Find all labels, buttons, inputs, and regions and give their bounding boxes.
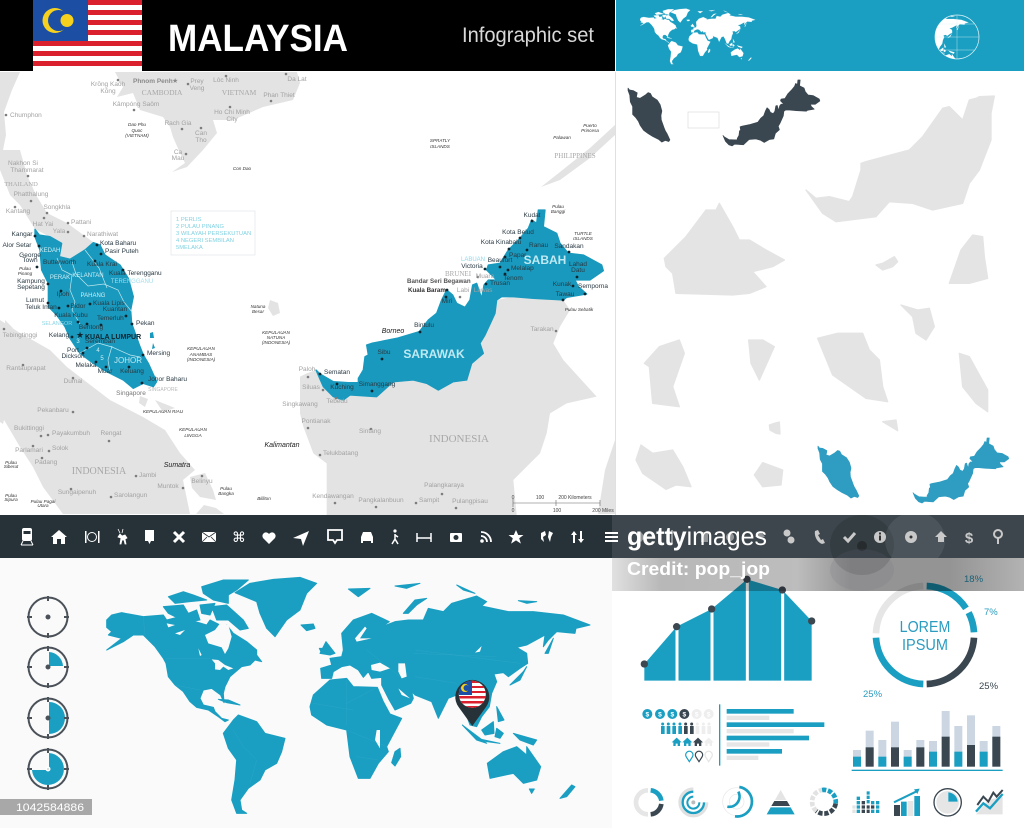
infographic rows: people [661,722,711,734]
map labels: Bukittinggi [14,425,44,432]
map labels: KELANTAN [72,273,104,279]
icon: cutlery [85,531,100,543]
map labels: Kuala Lipis [93,300,126,307]
map labels: Teluk Intan [25,304,57,311]
small icon: arcs [723,787,752,816]
map labels: Sipura [4,497,18,502]
map labels: Melalap [511,265,534,272]
world map [107,577,590,813]
watermark band [612,549,1024,591]
scale bar: 200 Miles [592,508,614,514]
map labels: ANAMBAS [189,352,213,357]
map labels: Can [195,130,207,137]
map labels: Sungaipenuh [58,489,97,496]
map labels: Bangka [218,491,234,496]
map labels: Parlamari [15,447,43,454]
map labels: Telukbatang [323,450,358,457]
map labels: Natuna [251,304,266,309]
map labels: Krŏng Kaôh [91,81,126,88]
map labels: Dickson [61,353,85,360]
watermark logo: gettyimages [627,521,767,551]
map labels: Kalimantan [264,442,300,449]
map labels: Utara [37,503,49,508]
map labels: Rantauprapat [6,365,46,372]
map labels: Singkawang [282,401,318,408]
icon: sort arrows [571,531,584,543]
map labels: Palawan [553,135,571,140]
map labels: Muar [98,368,113,375]
map labels: PHILIPPINES [554,152,596,160]
map labels: KEPULAUAN [262,330,291,335]
map labels: Keluang [120,368,144,375]
map labels: Songkhla [43,204,71,211]
map labels: Pulau Sebatik [565,307,594,312]
map labels: Nakhon Si [8,160,38,167]
scale bar: 100 [536,495,544,501]
percent label 25% blue: 25% [863,689,883,700]
map labels: Tebingtinggi [3,332,37,339]
map labels: Pulau [220,486,232,491]
small legend box [688,112,719,128]
map labels: Siluas [302,384,321,391]
map labels: Pangkalanbuun [358,497,404,504]
infographic rows: dollars: $ [695,711,699,718]
header: black title bar [0,0,615,71]
map labels: Temerluh [97,315,124,322]
map labels: Kuantan [103,306,127,313]
map labels: KEPULAUAN [187,346,216,351]
map labels: Tho [195,137,207,144]
panel: main map of Malaysia [0,72,615,515]
scale bar: 0 [512,508,515,514]
map legend box: 3 WILAYAH PERSEKUTUAN [176,231,251,237]
map labels: Semporna [578,283,608,290]
map legend box: 1 PERLIS [176,217,202,223]
map labels: Pulau [552,204,564,209]
map labels: Butterworth [43,259,77,266]
small icon: rising bars [894,789,920,816]
map labels: Yala [53,228,66,235]
map labels: Seremban [85,338,115,345]
map labels: LABUAN [461,257,485,263]
map labels: SABAH [524,253,566,267]
map labels: PAHANG [81,293,106,299]
map labels: Pulau [19,266,31,271]
stacked column chart [852,711,1003,771]
map labels: Prey [190,78,204,85]
map labels: Singapore [116,390,146,397]
map labels: Muntok [157,483,179,490]
icon: speech bubble [328,530,342,543]
map labels: Kuala Kubu [54,312,88,319]
map labels: Rach Gia [164,120,192,127]
small icon: pie clock [934,789,961,816]
infographic rows: dollars: $ [645,711,649,718]
area chart [641,576,815,682]
map labels: SARAWAK [403,347,465,361]
panel: lower-left background [0,558,612,828]
image id badge: 1042584886 [16,802,84,814]
map labels: KEPULAUAN RIAU [143,409,184,414]
map labels: Quoc [132,128,143,133]
toolbar [0,515,1024,558]
icon: phone [815,530,825,544]
percent label 25% dark: 25% [979,681,999,692]
icon: home [51,530,67,544]
map labels: Borneo [382,328,404,335]
donut centre label: LOREM [900,619,950,636]
map labels: PERAK [50,275,70,281]
seas and lakes: Eurasia [355,627,482,748]
map labels: Mersing [147,350,171,357]
map labels: LINGGA [184,433,202,438]
map labels: 4 [96,348,100,354]
map labels: Victoria [461,263,483,270]
map labels: Con Dao [233,166,252,171]
land: Kalimantan [300,297,597,515]
map labels: Palangkaraya [424,482,464,489]
map labels: Muara [476,273,495,280]
map labels: Pulangpisau [452,498,488,505]
icon: deer [118,529,127,544]
map labels: George [19,252,41,259]
title: MALAYSIA [168,18,348,60]
icon: walker [392,529,398,544]
map labels: Dao Phu [128,122,146,127]
map labels: Kelang [49,332,69,339]
map labels: Johor Baharu [148,376,187,383]
seas and lakes: Americas [167,623,233,670]
map labels: CAMBODIA [142,88,183,97]
watermark credit: Credit: pop_jop [627,559,770,579]
map labels: Paloh [299,366,316,373]
map labels: BRUNEI [445,270,472,278]
map labels: Kuching [330,384,354,391]
map labels: Pulau [5,493,17,498]
horizontal bar chart [727,709,824,760]
scale bar: 200 Kilometers [558,495,592,501]
map labels: Papar [509,252,527,259]
city markers: neighbouring countries [4,74,556,508]
map labels: Bandar Seri Begawan [407,278,471,285]
percent label 7%: 7% [984,607,998,618]
icon: star [508,530,524,544]
icon: check [844,533,855,541]
donut centre label [900,619,950,654]
panel divider [615,72,616,515]
map labels: Jambi [139,472,156,479]
map labels: Bentong [79,324,103,331]
infographic rows: houses [672,738,714,746]
icon: send [293,531,309,546]
silhouette: Malaysia blue [818,438,1009,503]
map labels: Payakumbuh [52,430,90,437]
map labels: Kuala Baram [408,287,446,294]
scale bar: 100 [553,508,561,514]
map labels: Bidor [70,303,86,310]
silhouette: Malaysia dark [628,80,820,146]
map labels: Ranau [529,242,549,249]
map labels: Kantang [6,208,30,215]
city markers: Malaysia [35,221,585,391]
map labels: Ho Chi Minh [214,109,250,116]
map labels: Melaka [76,362,97,369]
icon: earth [541,531,553,542]
map labels: KEPULAUAN [179,427,208,432]
map labels: Port [67,347,79,354]
country borders [143,617,520,783]
map labels: Datu [571,267,585,274]
map labels: Phnom Penh [133,78,173,85]
icons hidden behind watermark [637,530,765,544]
map labels: SPRATLY [430,138,451,143]
icon: flag marker [145,530,154,544]
map labels: INDONESIA [72,466,127,477]
clock: three quarters [27,748,69,790]
map labels: Sandakan [554,243,584,250]
percent label 18%: 18% [964,574,984,585]
map labels: Billiton [257,496,271,501]
map labels: Narathiwat [87,231,118,238]
map pin with Malaysian flag [455,680,489,726]
map labels: Solok [52,445,69,452]
map labels: Trusan [490,280,510,287]
map labels: Chumphon [10,112,42,119]
map labels: Sibu [377,349,391,356]
map labels: Town [22,257,38,264]
map labels: 3 [76,339,80,345]
map labels: Tawau [556,291,575,298]
infographics group [636,576,1003,816]
map labels: Kunak [553,281,572,288]
map labels: Sarolangun [114,492,148,499]
map labels: Pinang [18,271,33,276]
map labels: Thammarat [10,167,44,174]
icon: globe [934,14,980,60]
icon: location pin [994,530,1002,544]
map labels: Alor Setar [3,242,32,249]
map labels: JOHOR [114,356,142,365]
map labels: Sepetang [17,284,45,291]
icon: up arrow [935,531,947,542]
clock: empty [27,596,69,638]
map labels: Dumai [64,378,82,385]
map labels: Kota Baharu [100,240,137,247]
icon: mail [202,532,216,542]
map labels: TERENGGANU [111,279,153,285]
map labels: Padang [35,459,58,466]
small icon: pixel bars [852,791,879,813]
map labels: Tenom [503,275,523,282]
vertical rule [719,704,720,766]
map labels: Ca [174,149,183,156]
infographic rows: dollars: $ [670,711,674,718]
small icon: concentric rings [680,789,707,816]
map labels: KEDAH [40,248,60,254]
map labels: Kâmpóng Saôm [113,101,159,108]
map labels: Miri [442,298,452,305]
clock: quarter [27,646,69,688]
icon: camera [450,533,462,542]
map labels: Kampung [17,278,45,285]
infographic rows: dollars: $ [658,711,662,718]
map legend box: 2 PULAU PINANG [176,224,224,230]
land: Bangka island [190,473,216,500]
map labels: Da Lat [287,76,307,83]
donut chart [876,586,974,684]
infographic rows: dollars: $ [682,711,686,718]
panel: Malaysia state silhouettes [616,72,1024,515]
clock: half [27,697,69,739]
land: Cambodia and Vietnam [115,72,300,172]
map labels: Lumut [26,297,44,304]
map labels: Beaufort [488,257,512,264]
map labels: (INDONESIA) [262,340,291,345]
map labels: Kudat [524,212,541,219]
icon: bed [417,533,431,542]
map labels: INDONESIA [429,433,489,445]
icon: gears [784,530,794,544]
map labels: Phatthalung [14,191,49,198]
map labels: 5 [100,356,104,362]
infographic rows: pins [686,751,712,762]
icon: mini world map [640,9,755,64]
icon: heart [262,532,276,544]
land: small islands [0,300,280,514]
map labels: Tebedu [326,398,348,405]
map labels: Sampit [419,497,439,504]
map labels: Tarakan [530,326,554,333]
map labels: Simanggang [359,381,396,388]
map labels: Belinyu [191,478,213,485]
map labels: SELANGOR [42,321,72,327]
map labels: Rengat [101,430,122,437]
small icon: dashed donut [812,790,836,814]
map labels: Hat Yai [33,221,53,228]
map labels: Pulau [5,460,17,465]
map labels: SINGAPORE [148,387,179,393]
map labels: Sematan [324,369,350,376]
map labels: ISLANDS [430,144,451,149]
map labels: ISLANDS [573,236,594,241]
clock icons [27,596,69,790]
icon: cross [174,532,184,542]
map labels: Princesa [581,128,599,133]
state silhouettes in grey [636,96,994,489]
infographic rows: dollars [642,709,714,719]
East Malaysia: Sarawak and Sabah [316,210,603,400]
small icon: pyramid [767,790,795,814]
map labels: ★ [172,77,178,85]
map labels [3,76,608,508]
land: Palawan [541,125,615,187]
small icon: segmented donut [636,790,661,814]
map labels: Kŏng [100,88,116,95]
map legend box: 5MELAKA [176,245,203,251]
icon: command: ⌘ [232,530,246,546]
scale bar [512,495,614,514]
map labels: (VIETNAM) [125,133,149,138]
map labels: Phan Thiet [263,92,295,99]
map labels: VIETNAM [222,88,257,97]
small icon: area lines [976,790,1003,814]
land: Thailand and Malay peninsula north [0,72,93,260]
icon: dollar: $ [965,530,974,547]
map labels: Pulau Pagai [31,499,56,504]
header: blue bar [616,0,1024,71]
infographic rows: dollars: $ [707,711,711,718]
icon: car [361,532,373,543]
map labels: Pekanbaru [37,407,69,414]
capital markers: ★ [76,330,84,340]
map labels: Veng [190,85,205,92]
map labels: Sintang [359,428,381,435]
map labels: Pattani [71,219,91,226]
panel: lower-right background [612,558,1024,828]
map labels: Mau [172,155,185,162]
image id badge [0,799,92,815]
map labels: Kendawangan [312,493,354,500]
map labels: Besar [252,309,264,314]
map labels: Puerto [583,123,597,128]
Peninsular Malaysia [35,229,157,388]
map labels: Pasir Puteh [105,248,139,255]
map labels: Labi [457,287,469,294]
map labels: Bintulu [414,322,434,329]
scale bar: 0 [512,495,515,501]
land: bottom right corner [598,440,615,514]
map labels: Lahad [569,261,587,268]
map labels: THAILAND [4,181,38,188]
donut centre label: IPSUM [902,637,948,654]
map labels: Kota Belud [502,229,534,236]
icon: menu [605,532,618,542]
subtitle: Infographic set [462,24,594,47]
map labels: KUALA LUMPUR [85,334,141,341]
land: Sumatra [0,320,195,514]
flag of Malaysia [33,0,142,71]
map labels: Kangar [12,231,33,238]
map labels: TURTLE [574,231,593,236]
icon: radiation [905,531,917,543]
map labels: Kuala Terengganu [109,270,162,277]
map labels: Sumatra [164,462,190,469]
toolbar icons [21,528,618,546]
icon: rss [480,532,491,543]
map labels: Kota Kinabalu [481,239,522,246]
map labels: Pontianak [302,418,331,425]
toolbar icons right [637,530,1002,547]
map legend box [171,211,255,255]
map labels: Kuala Krai [87,261,117,268]
map legend box: 4 NEGERI SEMBILAN [176,238,234,244]
map labels: Siberut [4,464,19,469]
icon: info [874,531,886,543]
icon: train [21,528,33,545]
map labels: Lawas [474,287,493,294]
map labels: Banggi [551,209,566,214]
map labels: NATUNA [267,335,285,340]
map labels: City [226,116,238,123]
map labels: (INDONESIA) [187,357,216,362]
toolbar watermark tint [612,512,1024,575]
map labels: Ipoh [57,291,70,298]
map labels: Lôc Ninh [213,77,239,84]
map labels: Pekan [136,320,155,327]
